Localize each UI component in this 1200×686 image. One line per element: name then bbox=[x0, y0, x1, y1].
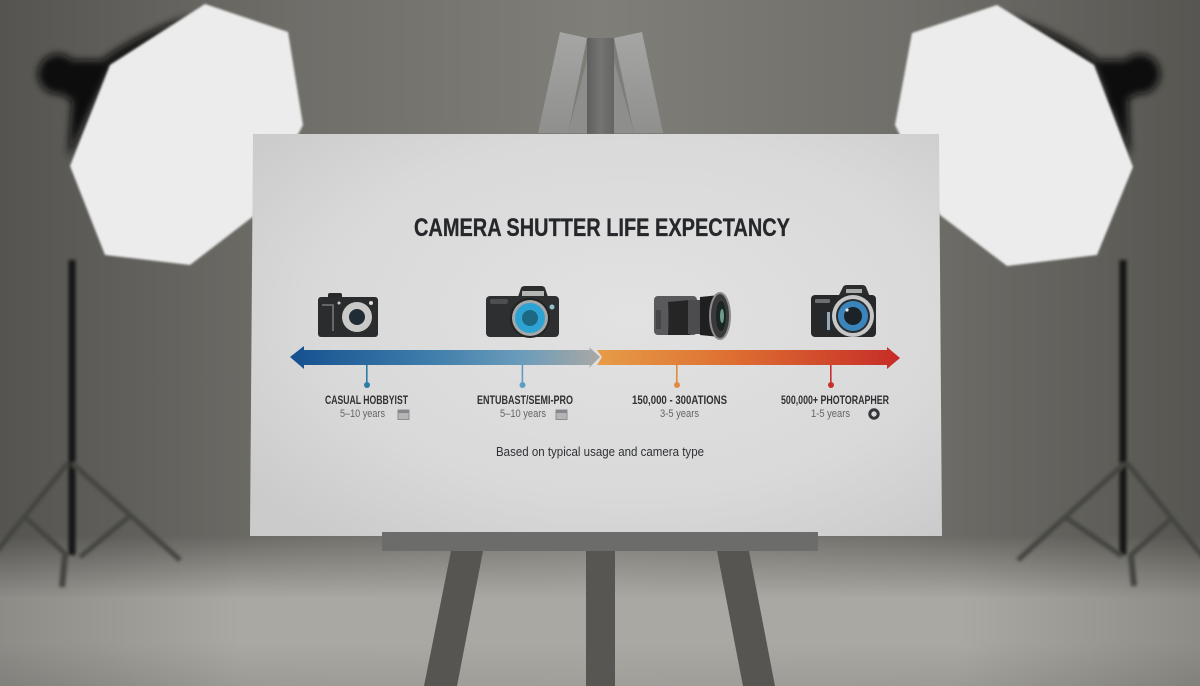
duration: 1-5 years bbox=[811, 408, 850, 420]
icon: calendar bbox=[556, 410, 567, 420]
label: 150,000 - 300ATIONS bbox=[632, 395, 727, 407]
left studio light bbox=[0, 4, 303, 587]
studio floor bbox=[0, 535, 1200, 686]
column: 500,000+ photographer bbox=[781, 365, 890, 420]
title: CAMERA SHUTTER LIFE EXPECTANCY bbox=[414, 214, 790, 242]
left light housing bbox=[38, 14, 195, 158]
easel legs bbox=[424, 551, 775, 686]
column: 150,000 to 300,000 actuations bbox=[632, 365, 727, 420]
marker bbox=[520, 365, 526, 388]
marker bbox=[674, 365, 680, 388]
left light stand bbox=[0, 260, 180, 587]
icon: DSLR camera professional bbox=[811, 285, 876, 337]
panel: infographic board bbox=[250, 134, 942, 536]
timeline arrow: blue segment bbox=[290, 346, 600, 369]
marker bbox=[364, 365, 370, 388]
footnote: Based on typical usage and camera type bbox=[496, 445, 704, 459]
label: ENTUBAST/SEMI-PRO bbox=[477, 395, 573, 407]
icon: calendar bbox=[398, 410, 409, 420]
left softbox bbox=[70, 4, 303, 265]
icon: shutter aperture bbox=[870, 410, 878, 418]
column: enthusiast semi-pro bbox=[477, 365, 573, 420]
label: CASUAL HOBBYIST bbox=[325, 395, 408, 407]
icon: compact camera bbox=[318, 293, 378, 337]
easel ledge bbox=[382, 532, 818, 551]
label: 500,000+ PHOTORAPHER bbox=[781, 395, 890, 407]
icon: camera with telephoto lens bbox=[654, 293, 730, 339]
duration: 3-5 years bbox=[660, 408, 699, 420]
duration: 5–10 years bbox=[340, 408, 385, 420]
right light stand bbox=[1018, 260, 1200, 586]
timeline arrow: orange to red segment bbox=[597, 347, 900, 369]
column: casual hobbyist bbox=[325, 365, 409, 420]
easel top bbox=[538, 32, 663, 134]
marker bbox=[828, 365, 834, 388]
right light housing bbox=[1005, 14, 1160, 158]
right softbox bbox=[895, 5, 1133, 266]
right studio light bbox=[895, 5, 1200, 586]
duration: 5–10 years bbox=[500, 408, 546, 420]
icon: DSLR camera blue lens bbox=[486, 286, 559, 338]
